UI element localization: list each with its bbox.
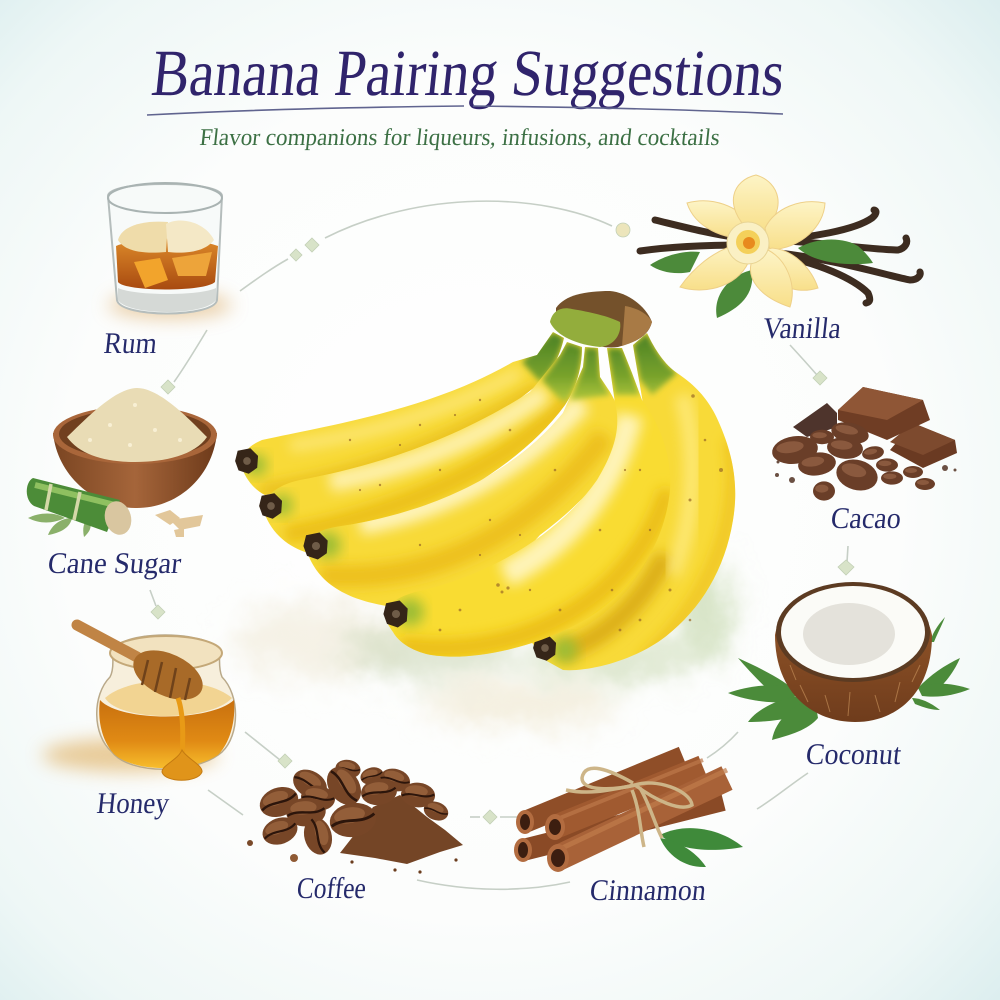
item: honey <box>42 625 236 820</box>
connector markers <box>151 223 854 824</box>
subtitle: Flavor companions for liqueurs, infusions, and cocktails <box>198 125 721 151</box>
label: honey: Honey <box>95 786 171 820</box>
label: coffee: Coffee <box>295 871 368 905</box>
icon: rum glass <box>108 183 232 319</box>
icon: honey jar <box>42 625 236 780</box>
item: coconut <box>728 582 970 771</box>
item: cinnamon <box>514 757 743 907</box>
item: coffee <box>247 758 463 905</box>
icon: sugar cane <box>27 478 203 538</box>
banana 3 <box>303 347 620 606</box>
banana speckles <box>349 394 723 631</box>
item: cane sugar <box>27 388 217 580</box>
banana 5 <box>530 333 735 670</box>
icon: vanilla flower and pods <box>640 175 920 318</box>
icon: coffee beans and grounds <box>247 758 463 874</box>
item: vanilla <box>640 175 920 345</box>
wash behind bananas <box>230 560 735 725</box>
item: cacao <box>770 387 957 535</box>
icon: cinnamon sticks <box>514 757 743 872</box>
label: cane sugar: Cane Sugar <box>46 546 183 580</box>
connectors <box>150 201 848 889</box>
bananas <box>235 291 735 670</box>
icon: sugar bowl <box>53 388 217 508</box>
banana 4 <box>383 348 670 657</box>
title: Banana Pairing Suggestions <box>148 37 788 110</box>
label: vanilla: Vanilla <box>761 311 843 345</box>
item: rum <box>102 183 232 360</box>
banana 2 <box>259 342 582 552</box>
icon: coconut <box>728 582 970 740</box>
label: rum: Rum <box>102 326 159 360</box>
banana crown <box>550 291 652 348</box>
label: cinnamon: Cinnamon <box>588 873 708 907</box>
label: coconut: Coconut <box>804 737 903 771</box>
banana 1 <box>235 332 564 495</box>
icon: chocolate and cacao beans <box>770 387 957 501</box>
label: cacao: Cacao <box>829 501 903 535</box>
